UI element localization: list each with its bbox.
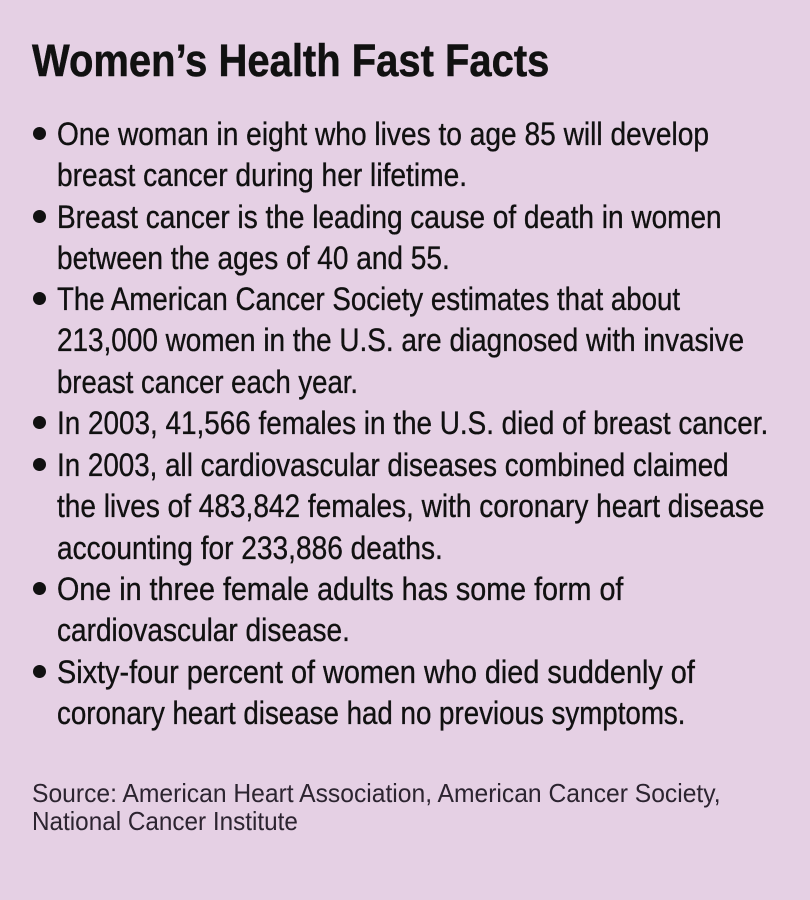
fact 3: The American Cancer Society estimates that about bbox=[57, 281, 680, 317]
fact 7: Sixty-four percent of women who died suddenly of bbox=[57, 654, 695, 690]
title: Women’s Health Fast Facts bbox=[32, 35, 549, 86]
fact 5: the lives of 483,842 females, with coronary heart disease bbox=[57, 488, 764, 524]
fact 7 bbox=[33, 654, 696, 731]
fact 5 bbox=[33, 447, 764, 566]
source note: Source: American Heart Association, American Cancer Society, bbox=[32, 778, 721, 808]
fact 3: breast cancer each year. bbox=[57, 364, 358, 400]
fact 2 bbox=[33, 199, 722, 276]
fact 7: coronary heart disease had no previous symptoms. bbox=[57, 695, 685, 731]
fact 3 bbox=[33, 281, 744, 400]
fact 2: between the ages of 40 and 55. bbox=[57, 240, 450, 276]
fact 1: breast cancer during her lifetime. bbox=[57, 157, 467, 193]
fact 6: cardiovascular disease. bbox=[57, 612, 350, 648]
fact 1 bbox=[33, 116, 709, 193]
fact 2: Breast cancer is the leading cause of death in women bbox=[57, 199, 722, 235]
fact 6 bbox=[33, 571, 624, 648]
fact 3: 213,000 women in the U.S. are diagnosed with invasive bbox=[57, 322, 744, 358]
fact 1: One woman in eight who lives to age 85 will develop bbox=[57, 116, 709, 152]
fact 4: In 2003, 41,566 females in the U.S. died of breast cancer. bbox=[57, 405, 768, 441]
fact 5: accounting for 233,886 deaths. bbox=[57, 530, 443, 566]
fact 6: One in three female adults has some form of bbox=[57, 571, 623, 607]
fact 5: In 2003, all cardiovascular diseases combined claimed bbox=[57, 447, 729, 483]
source note bbox=[32, 778, 721, 836]
source note: National Cancer Institute bbox=[32, 806, 298, 836]
